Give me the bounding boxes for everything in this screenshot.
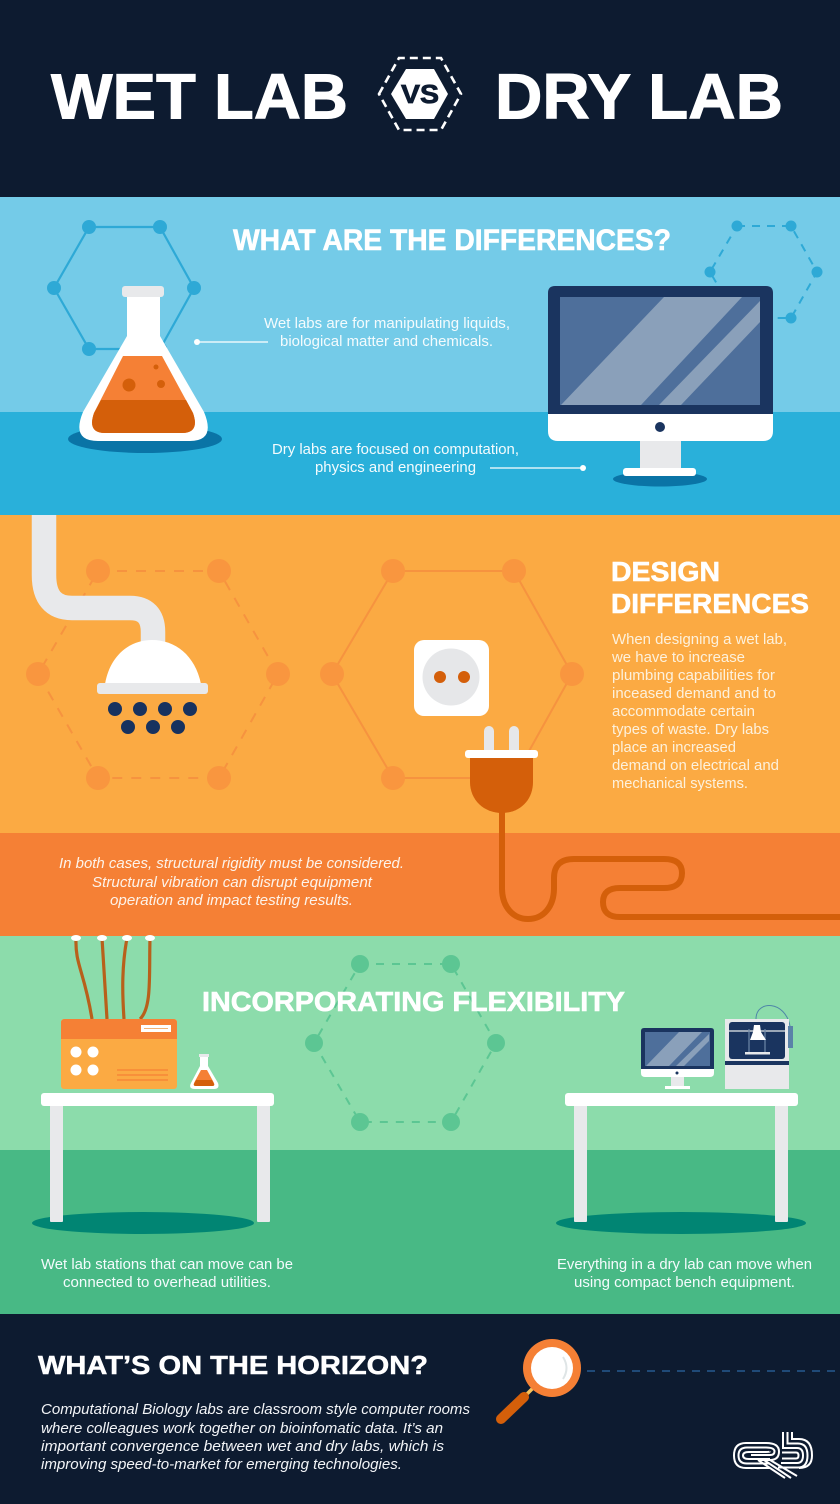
logo: crb [734, 1432, 812, 1478]
text block: design body: accommodate certain [612, 704, 755, 720]
panel: incorporating flexibility [0, 935, 840, 1314]
text block: structural rigidity: Structural vibration can disrupt equipment [92, 875, 373, 891]
icon: shower head [44, 515, 208, 734]
callout: wet labs: biological matter and chemicals. [280, 334, 493, 350]
title: wet lab: WET LAB [51, 60, 348, 132]
icon: magnifying glass [501, 1339, 581, 1419]
text block: design body: mechanical systems. [612, 776, 748, 792]
text block: design body: types of waste. Dry labs [612, 722, 769, 738]
text block: structural rigidity: operation and impact testing results. [110, 893, 353, 909]
hexagon: dashed molecule [305, 955, 505, 1131]
icon: plug and cord [465, 726, 840, 919]
text block: design body: we have to increase [611, 650, 745, 666]
text block: wet lab stations: connected to overhead utilities. [63, 1275, 271, 1291]
panel: what are the differences [0, 197, 840, 515]
hexagon: solid molecule [47, 220, 201, 356]
icon: 3D printer [725, 1006, 793, 1089]
text block: design body: plumbing capabilities for [612, 668, 775, 684]
text block: structural rigidity: In both cases, structural rigidity must be considered. [59, 856, 404, 872]
text block: design body: place an increased [612, 740, 736, 756]
panel: what's on the horizon [0, 1314, 840, 1504]
text block: dry lab equipment: using compact bench equipment. [574, 1275, 795, 1291]
icon: left table [32, 1093, 274, 1234]
text block: wet lab stations [41, 1257, 293, 1291]
heading: WHAT’S ON THE HORIZON? [38, 1350, 428, 1380]
icon: desktop monitor [548, 286, 773, 486]
icon: small monitor [641, 1028, 714, 1089]
hexagon: dashed molecule [704, 220, 822, 324]
hexagon: dashed molecule [26, 559, 290, 790]
hexagon: solid molecule [320, 559, 584, 790]
callout: dry labs: Dry labs are focused on computation, [272, 442, 519, 458]
icon: overhead utility wires [71, 935, 155, 1019]
callout: dry labs [272, 442, 586, 476]
callout: wet labs: Wet labs are for manipulating liquids, [264, 316, 510, 332]
icon: vs hexagon [379, 58, 461, 130]
text block: design body: inceased demand and to [612, 686, 776, 702]
text block: horizon body: important convergence between wet and dry labs, which is [41, 1439, 444, 1455]
callout: dry labs: physics and engineering [315, 460, 476, 476]
icon: right table [556, 1093, 806, 1234]
text block: horizon body: where colleagues work together on bioinfomatic data. It’s an [41, 1421, 443, 1437]
heading: DESIGN [611, 556, 720, 587]
panel: design differences [0, 515, 840, 936]
text block: design body [611, 632, 787, 792]
heading [611, 556, 809, 619]
callout: wet labs [194, 316, 510, 350]
title: dry lab: DRY LAB [495, 60, 783, 132]
text block: dry lab equipment [557, 1257, 812, 1291]
dashed line [587, 1370, 840, 1372]
text block: structural rigidity [59, 856, 404, 909]
icon: vs hexagon: VS [401, 79, 439, 109]
text block: horizon body: Computational Biology labs are classroom style computer rooms [41, 1402, 470, 1418]
heading: DIFFERENCES [611, 588, 809, 619]
text block: design body: When designing a wet lab, [612, 632, 787, 648]
icon: wall socket [414, 640, 489, 716]
text block: horizon body [41, 1402, 470, 1473]
icon: small flask [190, 1054, 218, 1089]
text block: design body: demand on electrical and [612, 758, 779, 774]
icon: wet lab equipment box [61, 1019, 177, 1089]
text block: wet lab stations: Wet lab stations that can move can be [41, 1257, 293, 1273]
heading: WHAT ARE THE DIFFERENCES? [233, 224, 671, 257]
text block: horizon body: improving speed-to-market for emerging technologies. [41, 1457, 402, 1473]
icon: flask [68, 286, 222, 453]
text block: dry lab equipment: Everything in a dry lab can move when [557, 1257, 812, 1273]
heading: INCORPORATING FLEXIBILITY [202, 986, 625, 1017]
panel: header [0, 0, 840, 197]
